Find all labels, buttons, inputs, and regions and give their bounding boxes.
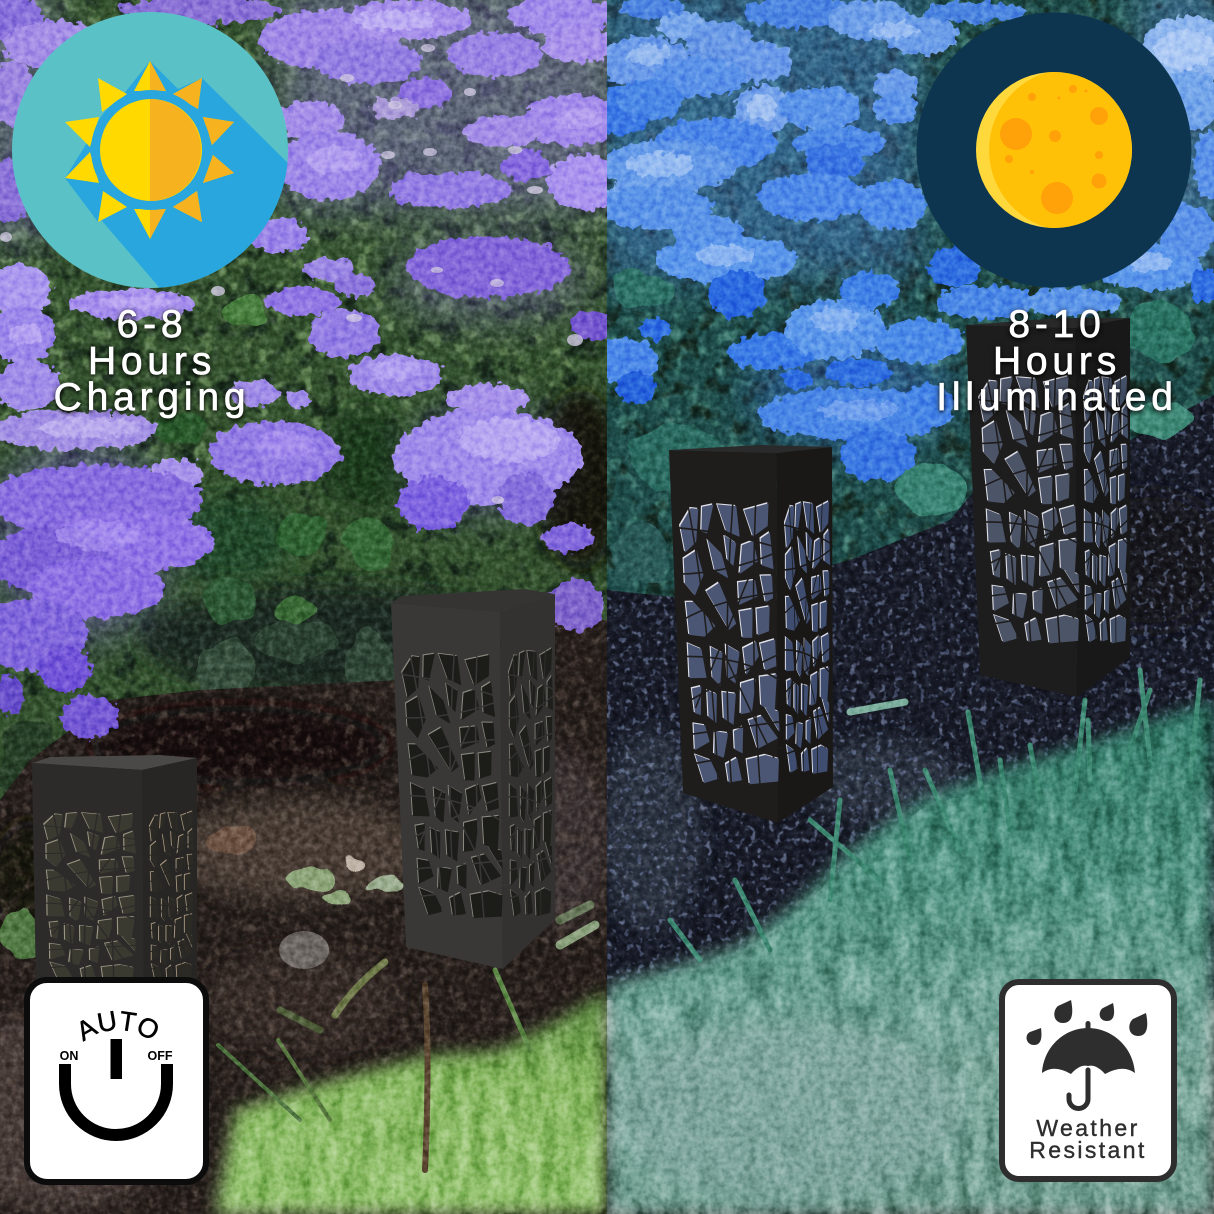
lavender flower clusters [0,0,623,739]
dark gaps in foliage [0,0,607,700]
panel: daytime garden photo (left half) [0,0,625,1214]
soil ground [0,620,610,1214]
auto arc path [68,1030,168,1062]
blue flower clusters [584,0,1214,481]
soil highlights [0,705,610,1210]
lantern: centre left, daytime [391,589,555,969]
caption: illuminated hours [935,303,1178,419]
pale plants and stones on soil [0,826,404,959]
panel: night garden photo (right half) [584,0,1214,1214]
lantern: top right, night [966,318,1130,697]
umbrella canopy [1042,1028,1135,1074]
foliage base [0,0,607,820]
green grass lower left [215,990,607,1214]
sun badge disc [12,12,288,288]
moon crescent [976,72,1132,228]
caption: charging hours: 6-8 [117,303,187,346]
caption: illuminated hours: Hours [993,340,1121,382]
leaf sprig on soil [850,702,905,712]
sun core shaded half [150,99,201,201]
lighter flower highlights [9,10,604,549]
leaves [0,296,398,820]
flower bud dots [0,44,583,504]
umbrella tip [1086,1021,1090,1030]
icon: auto on/off badge [24,977,209,1185]
auto label: AUTO [80,1010,158,1042]
icon: weather resistant badge [1002,982,1174,1179]
foliage base [607,0,1214,640]
caption: illuminated hours: 8-10 [1008,303,1106,346]
caption: charging hours: Hours [88,340,216,382]
blue flower highlights [626,22,1214,420]
grass blades and plants on the soil [218,905,595,1170]
pale blurred foreground grass [620,1020,960,1200]
umbrella handle [1069,1070,1088,1108]
craters [1000,85,1108,214]
off label: OFF [148,1049,173,1063]
sun ring [91,90,211,210]
soil specks [607,390,1214,1010]
soil specks [0,620,607,1214]
soil lighter zones [600,490,1214,930]
icon: sun badge [12,12,300,300]
badge card [27,980,206,1182]
lavender haze behind dense flower zone [0,0,620,640]
long shadow [65,61,300,300]
resistant label: Resistant [1029,1137,1147,1163]
pale leaf patches in upper foliage [0,0,607,470]
sun rays [65,61,234,239]
lantern: centre right, night [669,445,833,823]
moon body [989,69,1151,231]
tall grass blades [670,670,1200,960]
badge card [1002,982,1174,1179]
lantern: bottom left, daytime [32,755,197,990]
leaves [610,270,1196,585]
caption: charging hours [51,303,250,424]
night disc [916,12,1192,288]
sun core [100,99,202,201]
dark gaps in foliage [607,0,1214,640]
caption: illuminated hours: Illuminated [936,376,1178,419]
caption: charging hours: Charging [54,376,250,419]
rain drops [1027,1000,1147,1045]
on label: ON [60,1049,78,1063]
power arc [65,1064,167,1135]
blue-green grass lower right [607,700,1214,1214]
soil ground [600,390,1214,1010]
blue haze behind dense flower zone [600,0,1214,450]
pale teal leaf patches [607,0,1214,640]
stone on soil [279,931,329,969]
sun rays shaded half [134,61,234,239]
left grass blade texture [215,990,607,1214]
weather label: Weather [1036,1115,1140,1141]
dark shadow zones [140,390,625,695]
icon: moon badge [916,12,1192,288]
right grass blade texture [607,700,1214,1214]
power bar [110,1039,122,1079]
